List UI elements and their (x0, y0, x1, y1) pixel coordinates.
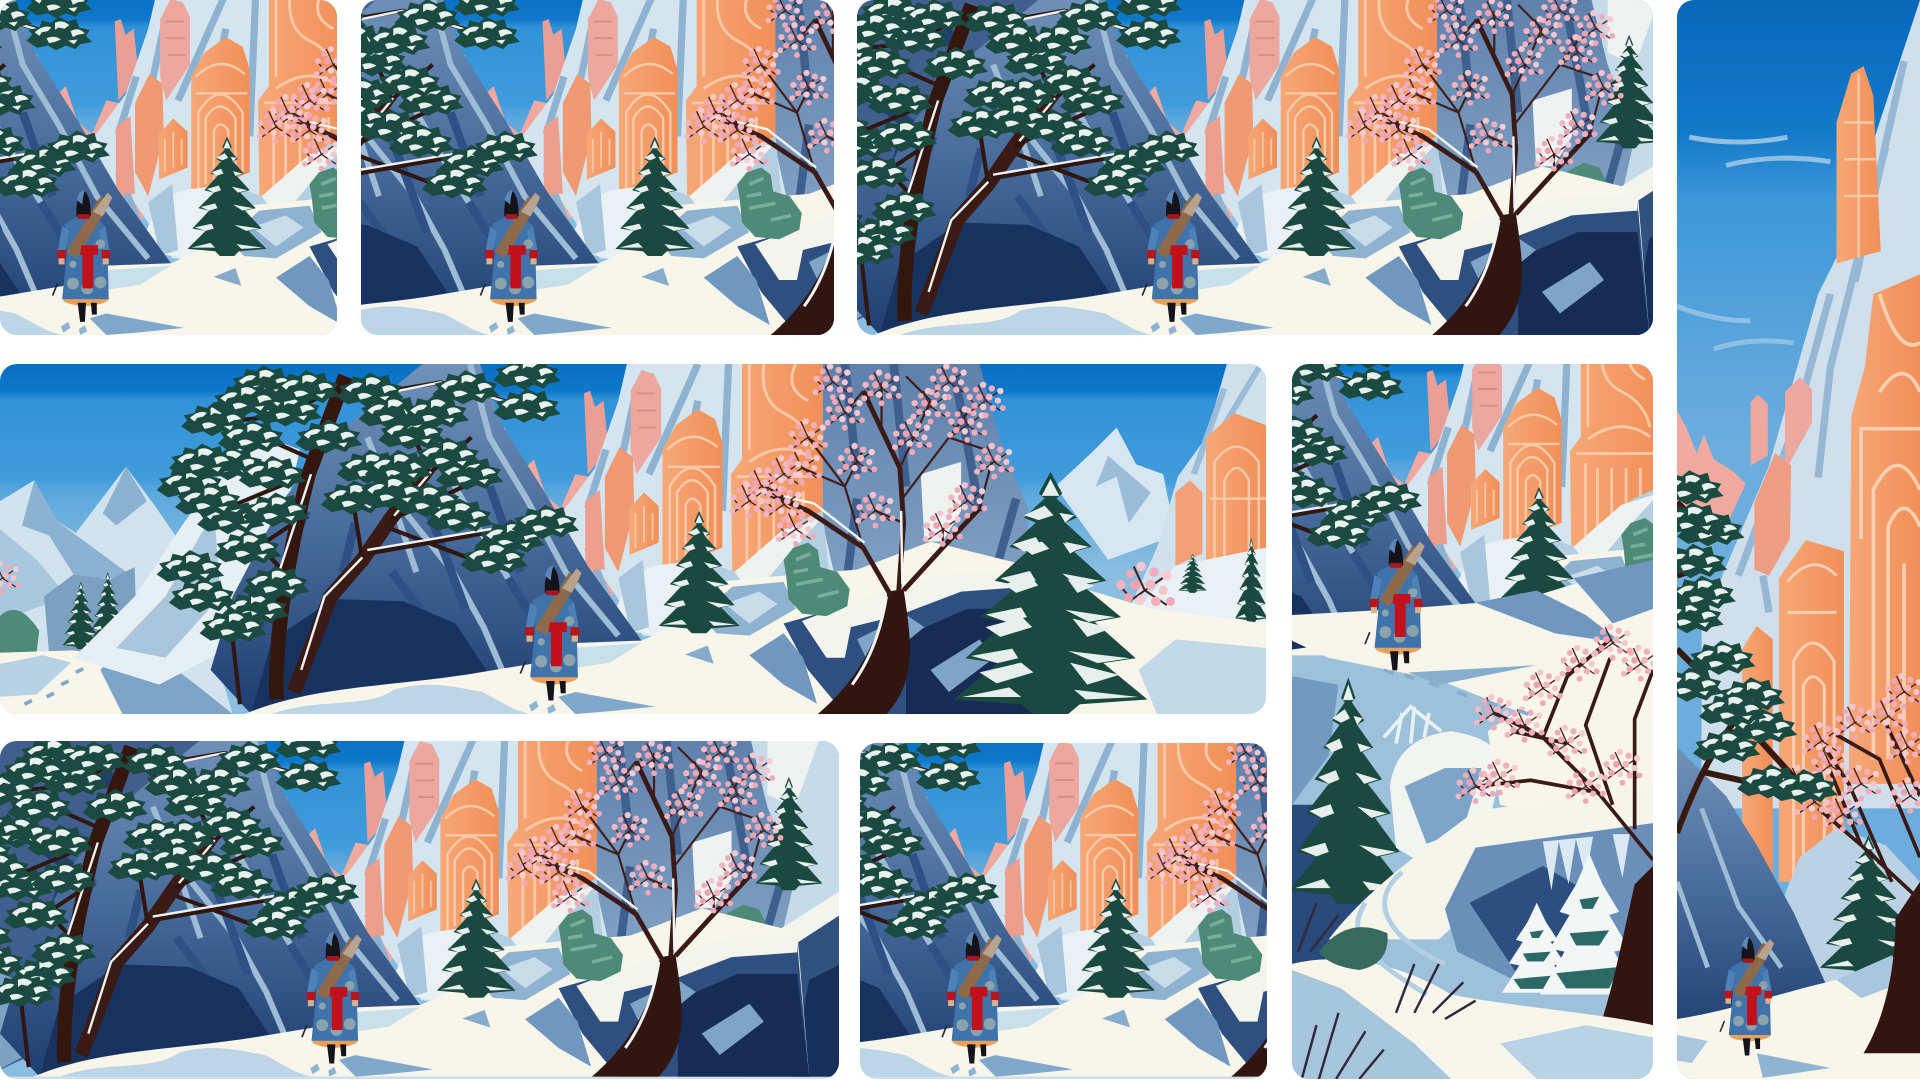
sky (0, 0, 780, 335)
figure: archer (53, 190, 112, 322)
panel: panoramic crop middle (0, 364, 1266, 714)
figure: archer (520, 566, 582, 701)
cherry tree (729, 363, 1014, 714)
pale foothill (1751, 828, 1920, 1017)
cherry branches (1818, 723, 1920, 900)
pine trunk and branches (1677, 502, 1812, 833)
rocks by the path (1476, 560, 1653, 643)
small spruce (1077, 878, 1155, 998)
snow ground and rocks (245, 541, 1041, 714)
figure shadow (1408, 665, 1537, 685)
foreground blue mound (1292, 970, 1451, 1079)
side slopes (826, 0, 1685, 335)
snow spruce (1502, 903, 1572, 993)
carved cliffs (25, 0, 549, 262)
small carved pillar (1742, 626, 1773, 882)
cherry tree (506, 734, 783, 1077)
large trunk (1600, 866, 1653, 1031)
cherry branches (1476, 639, 1653, 860)
icicles (1543, 834, 1630, 890)
blue mountain (840, 0, 1260, 335)
pale cliff (1702, 0, 1920, 808)
pink towers (1751, 377, 1812, 472)
blue mountain (0, 735, 420, 1077)
block carvings (1861, 294, 1920, 759)
distant mountains and side cliffs (0, 364, 1267, 714)
spire carvings (1844, 73, 1878, 257)
carved cliffs (492, 364, 1028, 639)
small spruce (437, 878, 516, 998)
snow ground around figure (1292, 560, 1653, 744)
large carved block (1849, 274, 1920, 784)
carved cliffs (1115, 0, 1637, 262)
rock shadows (1677, 955, 1910, 1063)
pine tree (126, 0, 538, 325)
pine foliage (1656, 470, 1838, 803)
snow spruce tall (1540, 854, 1639, 995)
panel: landscape crop top right (857, 0, 1653, 335)
carved door (1779, 540, 1844, 882)
figure: archer (942, 932, 1002, 1063)
small spruce (659, 511, 740, 633)
pine tree (157, 355, 579, 704)
footprints (1384, 670, 1528, 714)
snow covered rock (1390, 731, 1502, 866)
snow slope (1329, 786, 1653, 939)
figure: archer (302, 932, 362, 1063)
pine tree (0, 727, 359, 1067)
cherry trunk (1864, 882, 1920, 1053)
blue mountain (641, 735, 1060, 1077)
blue mountain (0, 0, 171, 335)
white shrub (1384, 707, 1441, 744)
cherry tree (1145, 734, 1422, 1077)
carved cliffs (915, 735, 1436, 1004)
panel: small crop bottom centre (860, 743, 1267, 1079)
carved cliffs (453, 0, 976, 262)
left dark rock (1292, 805, 1378, 964)
cherry tree (1346, 0, 1624, 335)
pine tree (589, 726, 999, 1067)
figure: archer (1142, 190, 1202, 322)
left blue rock (1292, 676, 1339, 805)
carved spire (1837, 66, 1881, 263)
figure: archer (1720, 937, 1774, 1055)
hill streaks (1677, 808, 1781, 968)
cherry tree (684, 0, 962, 335)
blue mountain (211, 364, 642, 714)
blue mountain (178, 0, 599, 335)
pink distant rock (1677, 410, 1746, 527)
small left door (1754, 453, 1791, 576)
figure: archer (480, 190, 540, 322)
cherry tree (256, 0, 535, 335)
snow ground and rocks (0, 166, 560, 335)
blossoms (1455, 624, 1661, 804)
sky (436, 735, 1667, 1077)
figure: archer (1365, 539, 1425, 670)
snow foreground (1292, 959, 1653, 1079)
panel: landscape crop bottom left (0, 741, 839, 1079)
right snow bank (1488, 646, 1653, 841)
carved cliffs (274, 735, 797, 1004)
lower pale background (1292, 655, 1653, 1079)
snow ground and rocks (212, 166, 988, 335)
left mountain extension (164, 0, 1024, 335)
figure shadow (1757, 1053, 1830, 1078)
winter shrubs (1298, 903, 1476, 1079)
blossoms (1780, 673, 1920, 832)
sky (0, 364, 1266, 714)
panel: tall crop far right (1677, 0, 1920, 1079)
panel: wide crop top (361, 0, 834, 335)
door carvings (1787, 565, 1837, 882)
snow path curve (1358, 872, 1445, 995)
side slopes (0, 735, 845, 1077)
upper scene (858, 335, 1920, 685)
pine tree (788, 0, 1200, 325)
sky (635, 0, 1869, 335)
spruce left (1290, 677, 1407, 904)
snow ground and rocks (874, 166, 1649, 335)
sky (1677, 0, 1920, 1079)
rock shadow (1405, 768, 1482, 844)
snow ground (1677, 955, 1920, 1079)
panel: tall crop centre right (1292, 364, 1653, 1079)
snow ground and rocks (674, 908, 1448, 1077)
cliff streaks (1738, 61, 1904, 612)
clouds (1677, 137, 1830, 349)
low green shrub (1319, 927, 1388, 970)
small spruce (188, 136, 266, 256)
blue hill (1677, 747, 1827, 1041)
small spruce (1277, 136, 1356, 256)
panel: square crop top left (0, 0, 337, 335)
sky (0, 0, 1208, 335)
snow ground and rocks (33, 908, 809, 1077)
large spruce (954, 472, 1147, 714)
cavern shadow (1469, 866, 1598, 982)
small spruce (615, 136, 694, 256)
sky (0, 735, 1029, 1077)
pine tree (0, 0, 110, 325)
spruce behind (1820, 835, 1917, 976)
foreground shadow (1500, 1025, 1653, 1079)
cavern rock (1445, 823, 1653, 988)
